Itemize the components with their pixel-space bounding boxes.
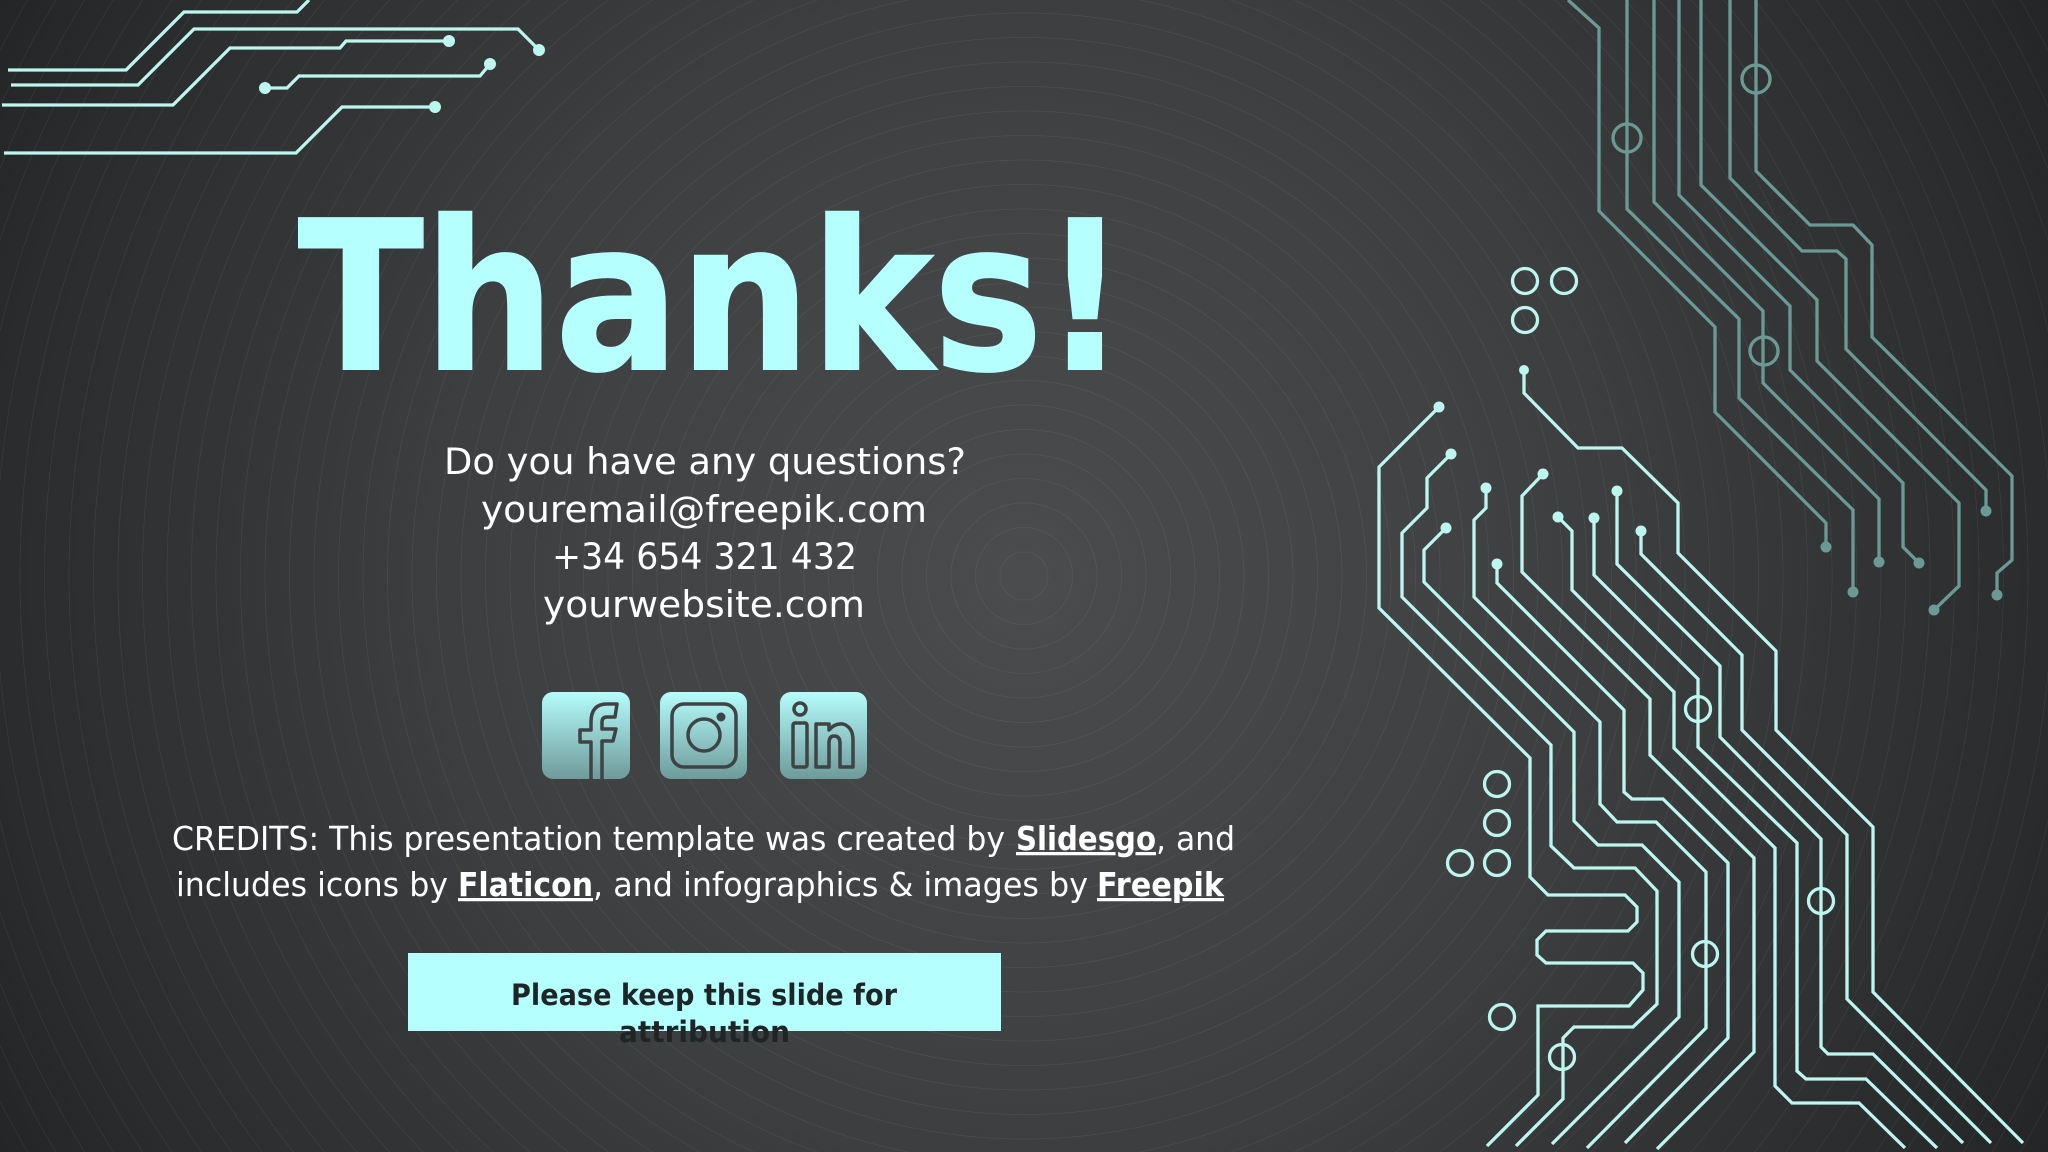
credits text bbox=[172, 820, 1235, 904]
contact text block: +34 654 321 432 bbox=[552, 535, 857, 578]
attribution button bbox=[408, 953, 1001, 1049]
credits text: Freepik bbox=[1097, 866, 1225, 904]
credits text: Flaticon bbox=[458, 866, 593, 904]
circuit traces: bottom right (bright) bbox=[1379, 268, 2023, 1149]
attribution button: attribution bbox=[619, 1015, 790, 1049]
icon: facebook bbox=[542, 692, 630, 779]
contact text block: youremail@freepik.com bbox=[481, 488, 927, 531]
credits text: , and infographics & images by bbox=[593, 866, 1088, 904]
icon: linkedin bbox=[780, 692, 867, 779]
credits text: CREDITS: This presentation template was created by bbox=[172, 820, 1005, 858]
contact text block: Do you have any questions? bbox=[444, 440, 966, 483]
attribution button: Please keep this slide for bbox=[511, 978, 898, 1012]
circuit traces: top left bbox=[2, 0, 545, 153]
social icons bbox=[542, 692, 867, 779]
contact text block: yourwebsite.com bbox=[543, 583, 865, 626]
credits text: Slidesgo bbox=[1016, 820, 1156, 858]
icon: instagram bbox=[660, 692, 747, 779]
title: Thanks! bbox=[298, 177, 1127, 418]
contact text block bbox=[444, 440, 966, 626]
credits text: , and bbox=[1156, 820, 1235, 858]
credits text: includes icons by bbox=[176, 866, 448, 904]
circuit traces: top right (muted) bbox=[1568, 0, 2012, 616]
